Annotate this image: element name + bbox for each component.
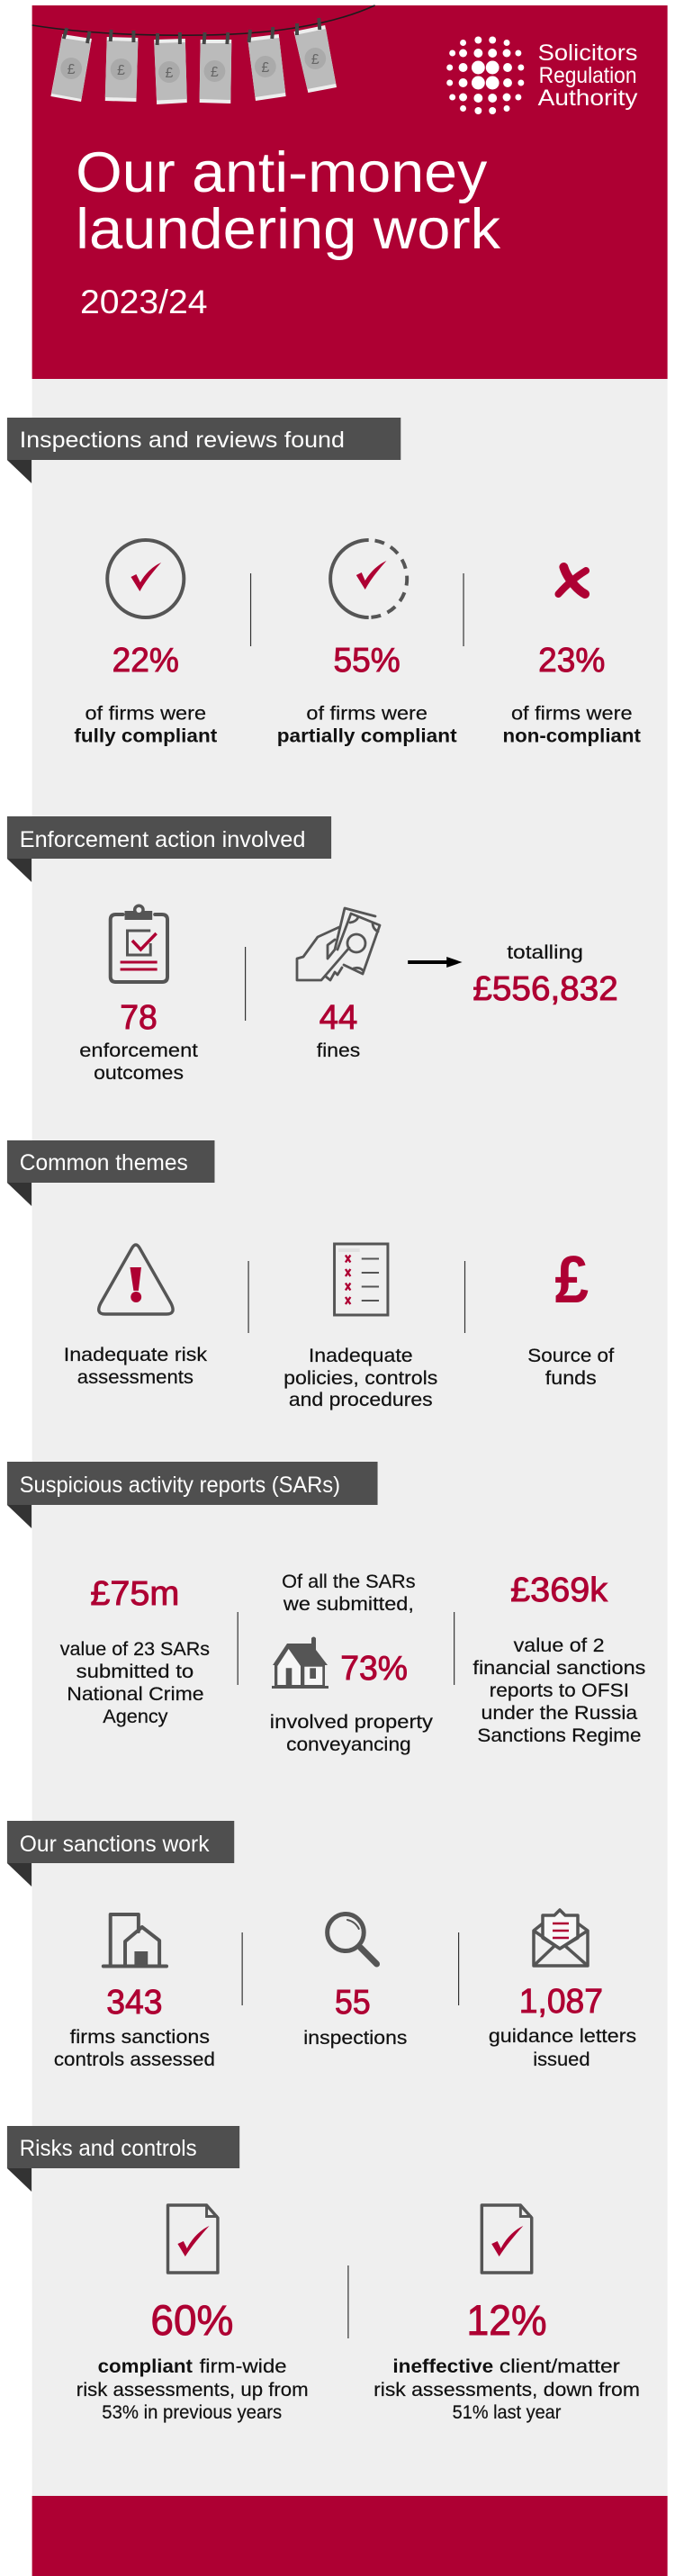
stat: firms assessed (54, 1914, 215, 2070)
caption: enforcement (79, 1040, 198, 1061)
figure 23%: 23% (538, 642, 605, 680)
section heading: Our sanctions work: Our sanctions work (20, 1832, 210, 1857)
caption: partially compliant (277, 725, 457, 747)
caption: guidance letters (489, 2025, 636, 2047)
stat: fines total: £556,832 (472, 970, 618, 1008)
icon: pound sign: £ (554, 1242, 589, 1317)
section heading: Enforcement action involved: Enforcement action involved (20, 827, 305, 852)
logo: Solicitors Regulation Authority: Solicitors (538, 41, 637, 66)
stat: inspections (303, 1914, 407, 2049)
icon: washing line with banknotes: £ (211, 65, 219, 80)
stat: enforcement outcomes (79, 904, 198, 1084)
section heading: Inspections and reviews found: Inspections and reviews found (20, 428, 345, 453)
icon: cross (558, 567, 586, 594)
icon: washing line with banknotes: £ (261, 60, 269, 76)
caption: involved property (270, 1711, 433, 1733)
stat: fines (297, 908, 380, 1061)
caption (527, 1345, 614, 1389)
caption: firms sanctions (70, 2026, 210, 2048)
header panel (32, 5, 668, 379)
caption (472, 1635, 645, 1746)
caption (503, 702, 641, 747)
title: laundering work (76, 198, 501, 261)
icon: checklist with crosses (335, 1244, 388, 1315)
section heading: Enforcement action involved (7, 816, 331, 882)
caption: submitted to (76, 1661, 194, 1682)
caption (284, 1345, 437, 1410)
caption: outcomes (94, 1062, 184, 1084)
theme: inadequate policies (284, 1244, 437, 1410)
caption (79, 1040, 198, 1084)
caption: of firms were (85, 702, 206, 725)
section heading: Risks and controls: Risks and controls (20, 2136, 197, 2161)
logo: Solicitors Regulation Authority: Authority (538, 86, 638, 111)
caption: controls assessed (54, 2049, 215, 2070)
caption: conveyancing (286, 1734, 411, 1755)
caption: fully compliant (74, 725, 217, 747)
icon: washing line with banknotes: £ (68, 62, 76, 77)
icon: washing line with banknotes: £ (166, 66, 174, 81)
icon: document with tick (168, 2205, 218, 2273)
subtitle: year: 2023/24 (80, 284, 208, 320)
logo: Solicitors Regulation Authority: Regulation (539, 63, 636, 88)
caption: National Crime (67, 1683, 204, 1705)
caption: firm-wide (200, 2355, 287, 2377)
stat: 60% compliant (76, 2205, 309, 2423)
stat: 73% property conveyancing: we submitted, (283, 1593, 414, 1615)
stat: £75m: £75m (90, 1575, 179, 1613)
figure 12%: 12% (466, 2297, 547, 2344)
caption: policies, controls (284, 1367, 437, 1389)
footer band (32, 2496, 668, 2576)
page background panel (32, 379, 668, 2496)
section heading: Our sanctions work (7, 1821, 234, 1887)
caption: under the Russia (482, 1702, 637, 1724)
section heading: Suspicious activity reports (7, 1462, 378, 1528)
icon: clipboard (111, 904, 167, 982)
arrow (408, 957, 463, 968)
caption: Inadequate (309, 1345, 413, 1366)
caption: 51% last year (453, 2401, 561, 2423)
stat: 73% property conveyancing: 73% (340, 1650, 408, 1688)
figure 60%: 60% (150, 2297, 233, 2344)
caption (489, 2025, 636, 2070)
figure 1,087: 1,087 (519, 1983, 603, 2021)
icon: magnifying glass (328, 1914, 377, 1964)
figure 343: 343 (106, 1984, 163, 2022)
stat: £369k: £369k (510, 1572, 608, 1609)
section heading: Risks and controls (7, 2126, 239, 2192)
caption: and procedures (289, 1389, 433, 1410)
icon: circle with tick (107, 540, 184, 617)
caption: Agency (103, 1706, 168, 1727)
caption: inspections (303, 2027, 407, 2049)
section heading: Suspicious activity reports: Suspicious activity reports (SARs) (20, 1473, 340, 1498)
caption: assessments (77, 1366, 194, 1388)
caption: funds (545, 1367, 597, 1389)
icon: washing line with banknotes: £ (311, 52, 320, 68)
caption: reports to OFSI (490, 1680, 629, 1701)
caption: Source of (527, 1345, 614, 1366)
section heading: Common themes (7, 1140, 214, 1206)
stat: partially compliant (277, 540, 457, 747)
icon: warning triangle (99, 1245, 173, 1314)
icon: open envelope with letter (534, 1910, 588, 1966)
caption: of firms were (306, 702, 428, 725)
caption: Sanctions Regime (477, 1725, 641, 1746)
icon: buildings (104, 1914, 166, 1966)
caption: of firms were (511, 702, 633, 725)
caption (374, 2355, 640, 2423)
stat: 73% property conveyancing (270, 1571, 433, 1755)
caption: risk assessments, up from (76, 2379, 309, 2400)
stat: fully compliant (74, 540, 217, 747)
caption: compliant (98, 2355, 193, 2377)
section heading: Inspections and reviews found (7, 418, 400, 483)
stat: fines total: totalling (507, 941, 583, 963)
theme: source of funds (527, 1242, 614, 1389)
caption: financial sanctions (472, 1657, 645, 1679)
title: Our anti-money (76, 141, 488, 204)
caption: value of 2 (514, 1635, 605, 1656)
caption (64, 1344, 207, 1388)
caption (74, 702, 217, 747)
figure 44: 44 (320, 999, 357, 1037)
icon: hand holding banknotes (297, 908, 380, 980)
caption: Inadequate risk (64, 1344, 207, 1365)
caption: client/matter (500, 2355, 620, 2377)
caption: value of 23 SARs (60, 1638, 210, 1660)
icon: washing line with banknotes: £ (117, 63, 125, 78)
stat: guidance letters (489, 1910, 636, 2070)
caption (60, 1638, 210, 1727)
section heading: Common themes: Common themes (20, 1150, 188, 1175)
caption (277, 702, 457, 747)
caption: issued (533, 2049, 590, 2070)
stat: £369k (472, 1572, 645, 1746)
stat: 73% property conveyancing: Of all the SARs (282, 1571, 416, 1592)
icon: house (272, 1636, 328, 1689)
caption: non-compliant (503, 725, 641, 747)
icon: document with tick (482, 2205, 532, 2273)
caption (76, 2355, 309, 2423)
stat: non-compliant (503, 567, 641, 747)
caption: ineffective (392, 2355, 493, 2377)
caption (270, 1711, 433, 1755)
title (76, 141, 501, 261)
caption (54, 2026, 215, 2070)
stat: £75m (60, 1575, 210, 1727)
icon: dashed circle with tick (330, 540, 407, 617)
logo: Solicitors Regulation Authority (446, 36, 638, 114)
figure 22%: 22% (112, 642, 179, 680)
icon: washing line with banknotes (32, 5, 375, 104)
figure 55: 55 (335, 1984, 371, 2022)
figure 55%: 55% (334, 642, 400, 680)
figure 78: 78 (120, 999, 158, 1037)
caption: fines (317, 1040, 360, 1061)
stat: fines total (472, 941, 618, 1008)
theme: inadequate risk assessments (64, 1245, 207, 1388)
caption: risk assessments, down from (374, 2379, 640, 2400)
stat: 12% ineffective (374, 2205, 640, 2423)
caption: 53% in previous years (102, 2401, 282, 2423)
